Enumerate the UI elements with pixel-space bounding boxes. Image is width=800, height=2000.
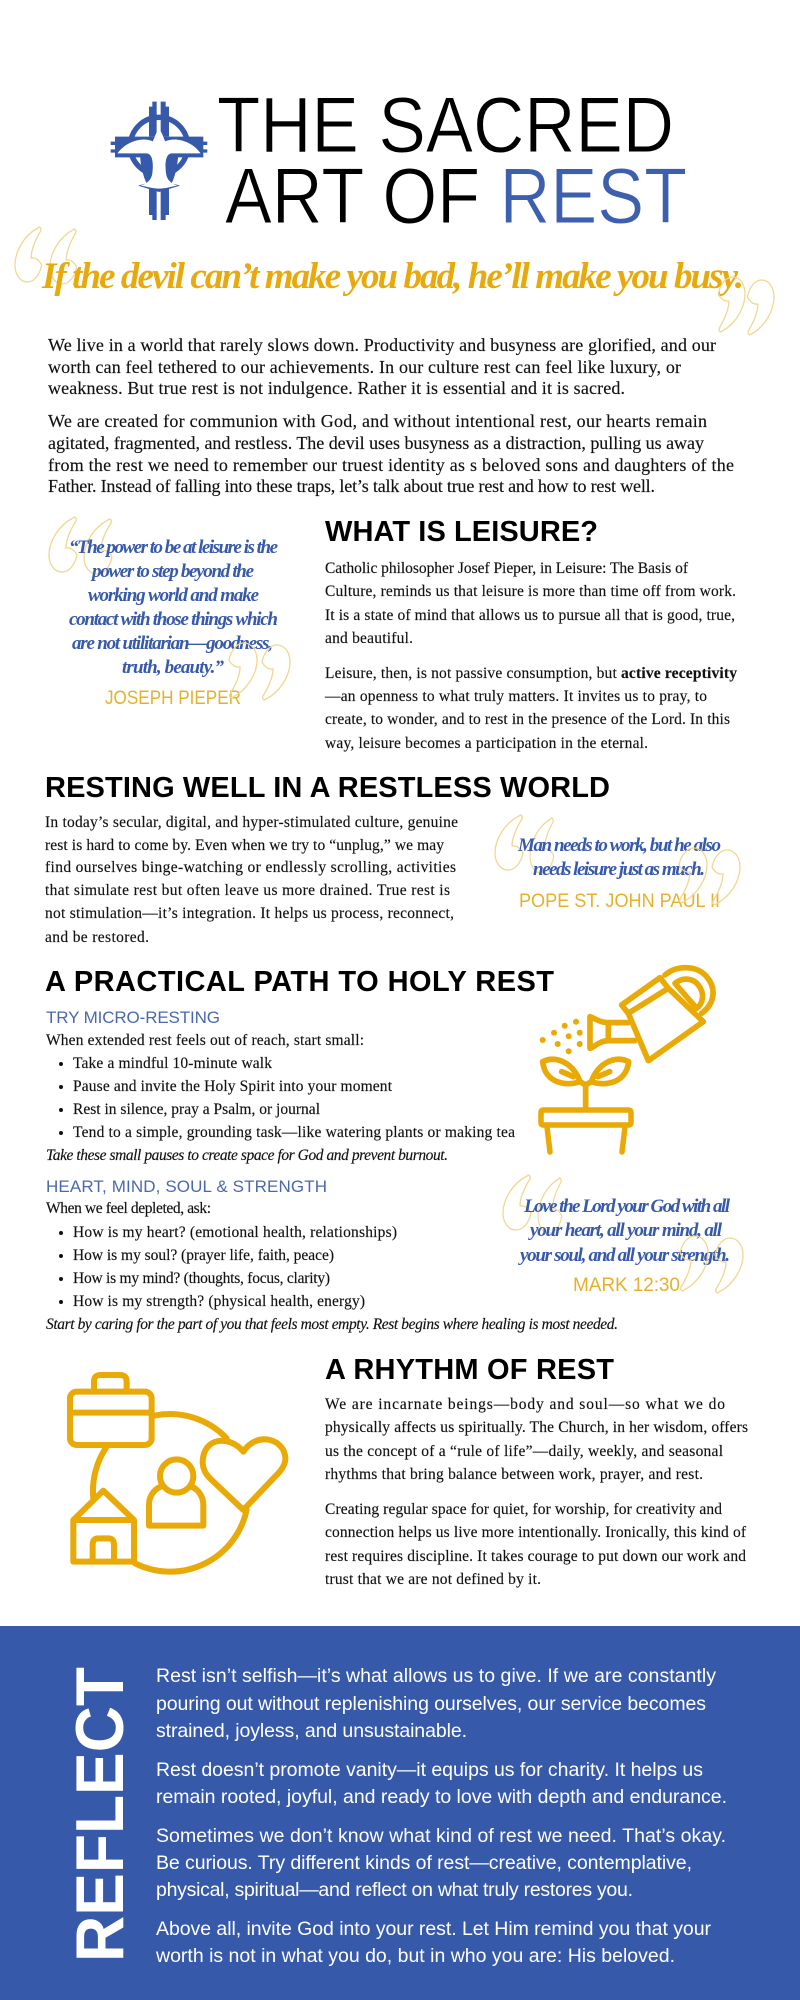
text: rhythm paragraph 1: us the concept of a “rule of life”—daily, weekly, and seasonal [325, 1443, 723, 1460]
intro paragraph 2: agitated, fragmented, and restless. The devil uses busyness as a distraction, pulling us away [48, 433, 704, 453]
text: rhythm paragraph 2: Creating regular space for quiet, for worship, for creativity and [325, 1501, 722, 1518]
text: depleted intro: When we feel depleted, ask: [46, 1200, 211, 1217]
quote text: power to step beyond the [90, 561, 255, 582]
text: micro-resting note: Take these small pauses to create space for God and prevent burnout. [46, 1147, 448, 1164]
header: logo and title [111, 80, 687, 240]
text: reflect paragraph 4: worth is not in what you do, but in who you are: His beloved. [155, 1945, 675, 1967]
text: caring note: Start by caring for the part of you that feels most empty. Rest begins where healing is most needed. [46, 1316, 618, 1333]
title line 1: THE SACRED [217, 80, 674, 169]
text: rhythm paragraph 2: connection helps us live more intentionally. Ironically, this kind of [325, 1524, 747, 1541]
panel: Joseph Pieper quote [49, 517, 290, 709]
intro paragraph 1 [48, 335, 716, 398]
list: self-check questions [59, 1224, 397, 1310]
attribution: POPE ST. JOHN PAUL II [519, 891, 720, 912]
heading: practical path: A PRACTICAL PATH TO HOLY REST [45, 966, 554, 998]
text: leisure paragraph 2: Leisure, then, is not passive consumption, but active receptivity [325, 665, 737, 682]
text: leisure paragraph 1: and beautiful. [325, 630, 413, 647]
list: self-check questions: How is my mind? (thoughts, focus, clarity) [73, 1270, 330, 1287]
text: reflect paragraph 1: Rest isn’t selfish—it’s what allows us to give. If we are constantly [156, 1665, 716, 1687]
quote text [69, 537, 279, 678]
intro paragraph 2: Father. Instead of falling into these traps, let’s talk about true rest and how to rest well. [48, 476, 655, 496]
quote text: contact with those things which [69, 609, 278, 630]
list: self-check questions: How is my strength? (physical health, energy) [73, 1293, 365, 1310]
text: reflect paragraph 3: Sometimes we don’t know what kind of rest we need. That’s okay. [156, 1825, 726, 1847]
intro paragraph 2: We are created for communion with God, and without intentional rest, our hearts remain [48, 411, 707, 431]
text: leisure paragraph 2 [324, 665, 737, 752]
quote text: needs leisure just as much. [533, 859, 705, 880]
subheading: try micro-resting: TRY MICRO-RESTING [46, 1008, 220, 1027]
icon: opening quote marks [495, 815, 554, 873]
list: micro-resting: Take a mindful 10-minute walk [73, 1055, 272, 1072]
quote text: “The power to be at leisure is the [69, 537, 279, 558]
quote text: your soul, and all your strength. [518, 1245, 730, 1266]
icon: closing quote marks [679, 848, 740, 905]
water drops [540, 1019, 583, 1054]
heading: what is leisure: WHAT IS LEISURE? [325, 516, 598, 548]
text: rhythm paragraph 1: We are incarnate beings—body and soul—so what we do [325, 1396, 725, 1413]
text: rhythm paragraph 2: rest requires discipline. It takes courage to put down our work and [325, 1548, 746, 1565]
intro paragraph 1: weakness. But true rest is not indulgence. Rather it is essential and it is sacred. [48, 378, 625, 398]
subheading: heart mind soul strength: HEART, MIND, SOUL & STRENGTH [46, 1177, 327, 1196]
plant pot [541, 1110, 631, 1152]
list: micro-resting: Pause and invite the Holy Spirit into your moment [73, 1078, 393, 1095]
text: reflect paragraph 3: Be curious. Try different kinds of rest—creative, contemplative, [156, 1852, 692, 1874]
panel: Mark 12:30 quote [503, 1175, 743, 1296]
icon: watering can and plant [540, 968, 713, 1152]
quote text: are not utilitarian—goodness, [72, 633, 273, 654]
icon: cross with dove logo [111, 102, 207, 220]
quote text [517, 835, 721, 880]
text: leisure paragraph 2: way, leisure becomes a participation in the eternal. [325, 735, 648, 752]
text: reflect paragraph 4 [155, 1918, 712, 1967]
text: leisure paragraph 1 [325, 560, 736, 647]
text: restless world paragraph: find ourselves binge-watching or endlessly scrolling, activities [45, 859, 456, 876]
list: micro-resting [59, 1055, 515, 1141]
text: restless world paragraph: not stimulation—it’s integration. It helps us process, reconnect, [45, 905, 454, 922]
icon: opening quote marks [503, 1175, 562, 1233]
text: reflect paragraph 1: strained, joyless, and unsustainable. [156, 1720, 467, 1742]
heading: reflect (vertical): REFLECT [62, 1667, 138, 1962]
quote text: Man needs to work, but he also [517, 835, 721, 856]
text: leisure paragraph 1: Culture, reminds us that leisure is more than time off from work. [325, 583, 736, 600]
text: restless world paragraph: rest is hard to come by. Even when we try to “unplug,” we may [45, 837, 444, 854]
icon: opening quote marks [49, 517, 112, 574]
text: restless world paragraph [45, 814, 458, 946]
text: micro-resting intro: When extended rest feels out of reach, start small: [46, 1032, 364, 1049]
quote text: truth, beauty.” [122, 657, 224, 678]
attribution: JOSEPH PIEPER [105, 688, 241, 709]
text: reflect paragraph 2 [156, 1759, 727, 1808]
quote text: your heart, all your mind, all [528, 1220, 723, 1241]
attribution: MARK 12:30 [573, 1275, 680, 1296]
quote text: Love the Lord your God with all [523, 1196, 731, 1217]
panel: reflect [0, 1626, 800, 2000]
text: leisure paragraph 1: It is a state of mind that allows us to pursue all that is good, true, [325, 607, 735, 624]
title line 2: ART OF REST [225, 151, 687, 240]
quote text: working world and make [88, 585, 260, 606]
pull quote: devil busy [15, 227, 774, 335]
text: reflect paragraph 2: remain rooted, joyful, and ready to love with depth and endurance. [156, 1786, 727, 1808]
list: self-check questions: How is my soul? (prayer life, faith, peace) [73, 1247, 334, 1264]
text: restless world paragraph: and be restored. [45, 929, 149, 946]
icon: closing quote marks [229, 643, 290, 700]
text: leisure paragraph 1: Catholic philosopher Josef Pieper, in Leisure: The Basis of [325, 560, 689, 577]
intro paragraph 2 [48, 411, 734, 496]
text: restless world paragraph: that simulate rest but often leave us more drained. True rest is [45, 882, 450, 899]
text: leisure paragraph 2: create, to wonder, and to rest in the presence of the Lord. In this [325, 711, 730, 728]
text: reflect paragraph 2: Rest doesn’t promote vanity—it equips us for charity. It helps us [156, 1759, 703, 1781]
icon: closing quote marks [680, 1236, 743, 1293]
heading: a rhythm of rest: A RHYTHM OF REST [325, 1354, 614, 1386]
text: reflect paragraph 3 [156, 1825, 726, 1901]
text: leisure paragraph 2: —an openness to what truly matters. It invites us to pray, to [324, 688, 707, 705]
intro paragraph 1: worth can feel tethered to our achievements. In our culture rest can feel like luxury, or [48, 357, 681, 377]
text: reflect paragraph 1 [156, 1665, 716, 1742]
list: micro-resting: Tend to a simple, grounding task—like watering plants or making tea [73, 1124, 515, 1141]
icon: opening quote marks [15, 227, 77, 284]
text: reflect paragraph 3: physical, spiritual—and reflect on what truly restores you. [156, 1879, 633, 1901]
text: rhythm paragraph 1: rhythms that bring balance between work, prayer, and rest. [325, 1466, 703, 1483]
text: restless world paragraph: In today’s secular, digital, and hyper-stimulated culture, genuine [45, 814, 458, 831]
text: rhythm paragraph 2: trust that we are not defined by it. [325, 1571, 541, 1588]
icon: closing quote marks [718, 277, 774, 335]
quote text [518, 1196, 731, 1266]
text: rhythm paragraph 2 [325, 1501, 747, 1588]
heading: resting well: RESTING WELL IN A RESTLESS WORLD [45, 772, 610, 804]
text: rhythm paragraph 1: physically affects us spiritually. The Church, in her wisdom, offers [325, 1419, 748, 1436]
list: self-check questions: How is my heart? (emotional health, relationships) [73, 1224, 397, 1241]
text: reflect paragraph 4: Above all, invite God into your rest. Let Him remind you that your [156, 1918, 712, 1940]
panel: John Paul II quote [495, 815, 740, 912]
text: rhythm paragraph 1 [325, 1396, 748, 1483]
intro paragraph 2: from the rest we need to remember our truest identity as s beloved sons and daughters of the [48, 455, 734, 475]
quote text: If the devil can’t make you bad, he’ll make you busy. [41, 256, 744, 297]
text: reflect paragraph 1: pouring out without replenishing ourselves, our service becomes [156, 1693, 706, 1715]
intro paragraph 1: We live in a world that rarely slows down. Productivity and busyness are glorified, and our [48, 335, 716, 355]
icon: work, home, self and heart on a circle [70, 1375, 285, 1572]
list: micro-resting: Rest in silence, pray a Psalm, or journal [73, 1101, 320, 1118]
